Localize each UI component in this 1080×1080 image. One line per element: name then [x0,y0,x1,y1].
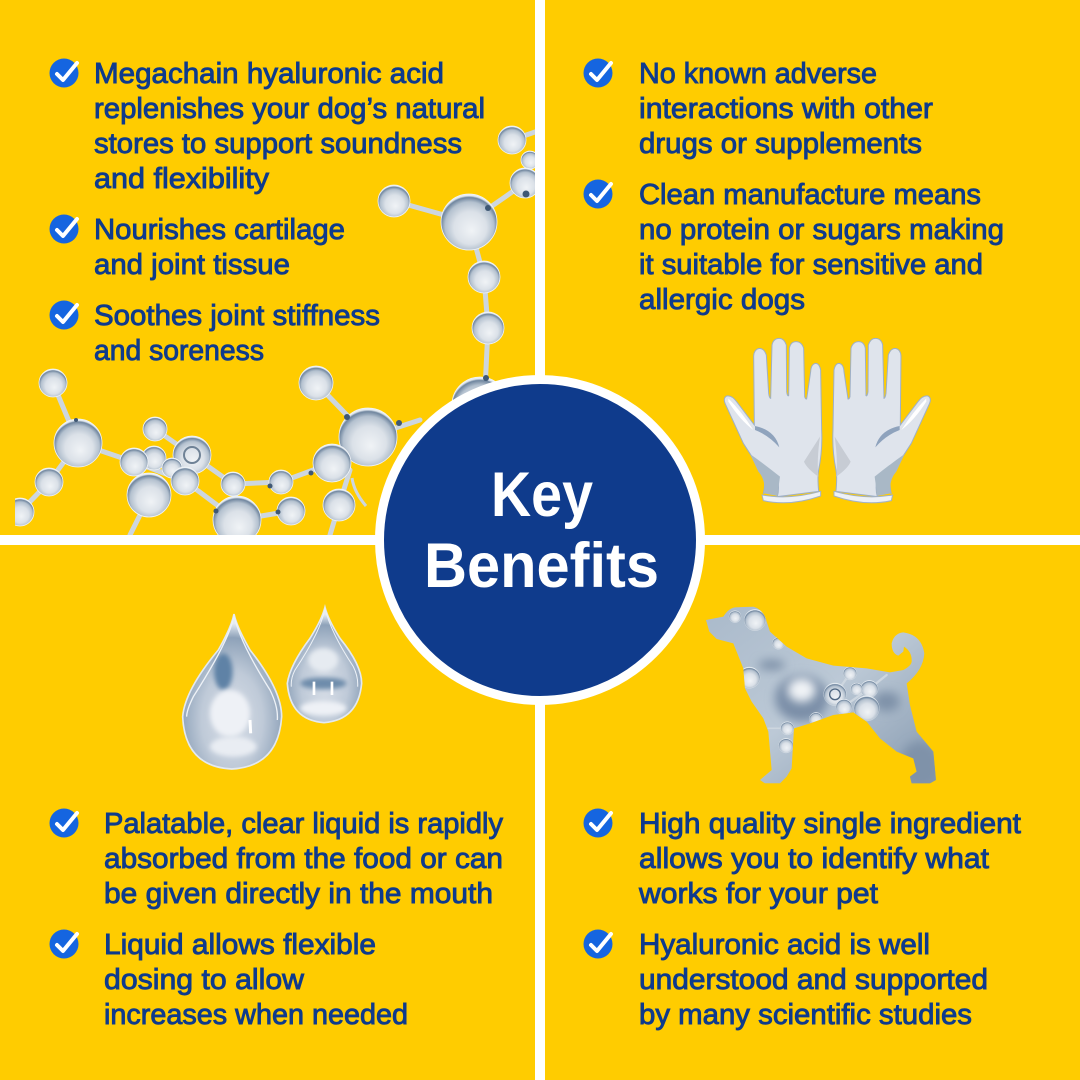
title: Key [491,460,593,530]
text: top right benefits: drugs or supplements [639,128,922,160]
text: top right benefits: interactions with other [639,93,933,125]
text: bottom left benefits: Liquid allows flexible [104,929,376,961]
text: top right benefits: No known adverse [639,58,877,90]
text: bottom left benefits: Palatable, clear liquid is rapidly [104,808,504,840]
text: bottom right benefits: allows you to identify what [639,843,989,875]
text: top left benefits [94,58,485,367]
icon: dog silhouette with molecules [703,602,940,788]
text: bottom left benefits: absorbed from the food or can [104,843,503,875]
title [424,460,659,601]
text: bottom right benefits: by many scientific studies [639,999,972,1031]
text: top left benefits: and flexibility [94,163,270,195]
text: top left benefits: Nourishes cartilage [94,214,345,246]
text: top left benefits: and joint tissue [94,249,290,281]
check icons [50,58,612,958]
text: bottom left benefits: be given directly in the mouth [104,878,493,910]
text: top left benefits: Megachain hyaluronic acid [94,58,444,90]
text: top left benefits: and soreness [94,335,264,367]
text: top left benefits: replenishes your dog’s natural [94,93,485,125]
text: bottom right benefits: works for your pet [638,878,878,910]
text: bottom right benefits: understood and supported [639,964,988,996]
text: bottom right benefits: High quality single ingredient [639,808,1021,840]
text: top left benefits: stores to support soundness [94,128,462,160]
text: top right benefits: allergic dogs [639,284,805,316]
icon: water drops [183,607,362,769]
center badge [380,380,700,700]
text: bottom right benefits [638,808,1021,1031]
title: Benefits [424,531,659,601]
icon: gloves [724,338,930,503]
text: bottom left benefits: increases when needed [104,999,408,1031]
large drop [183,614,282,769]
text: top right benefits: no protein or sugars making [639,214,1004,246]
text: top right benefits: it suitable for sensitive and [639,249,983,281]
text: bottom left benefits: dosing to allow [104,964,305,996]
text: bottom left benefits [104,808,504,1031]
small drop [287,607,362,723]
text: bottom right benefits: Hyaluronic acid is well [639,929,930,961]
badge circle [380,380,700,700]
right glove [833,338,930,503]
text: top right benefits: Clean manufacture means [639,179,981,211]
text: top left benefits: Soothes joint stiffness [94,300,380,332]
molecule illustration [6,126,540,544]
left glove [724,338,822,503]
text: top right benefits [639,58,1004,316]
